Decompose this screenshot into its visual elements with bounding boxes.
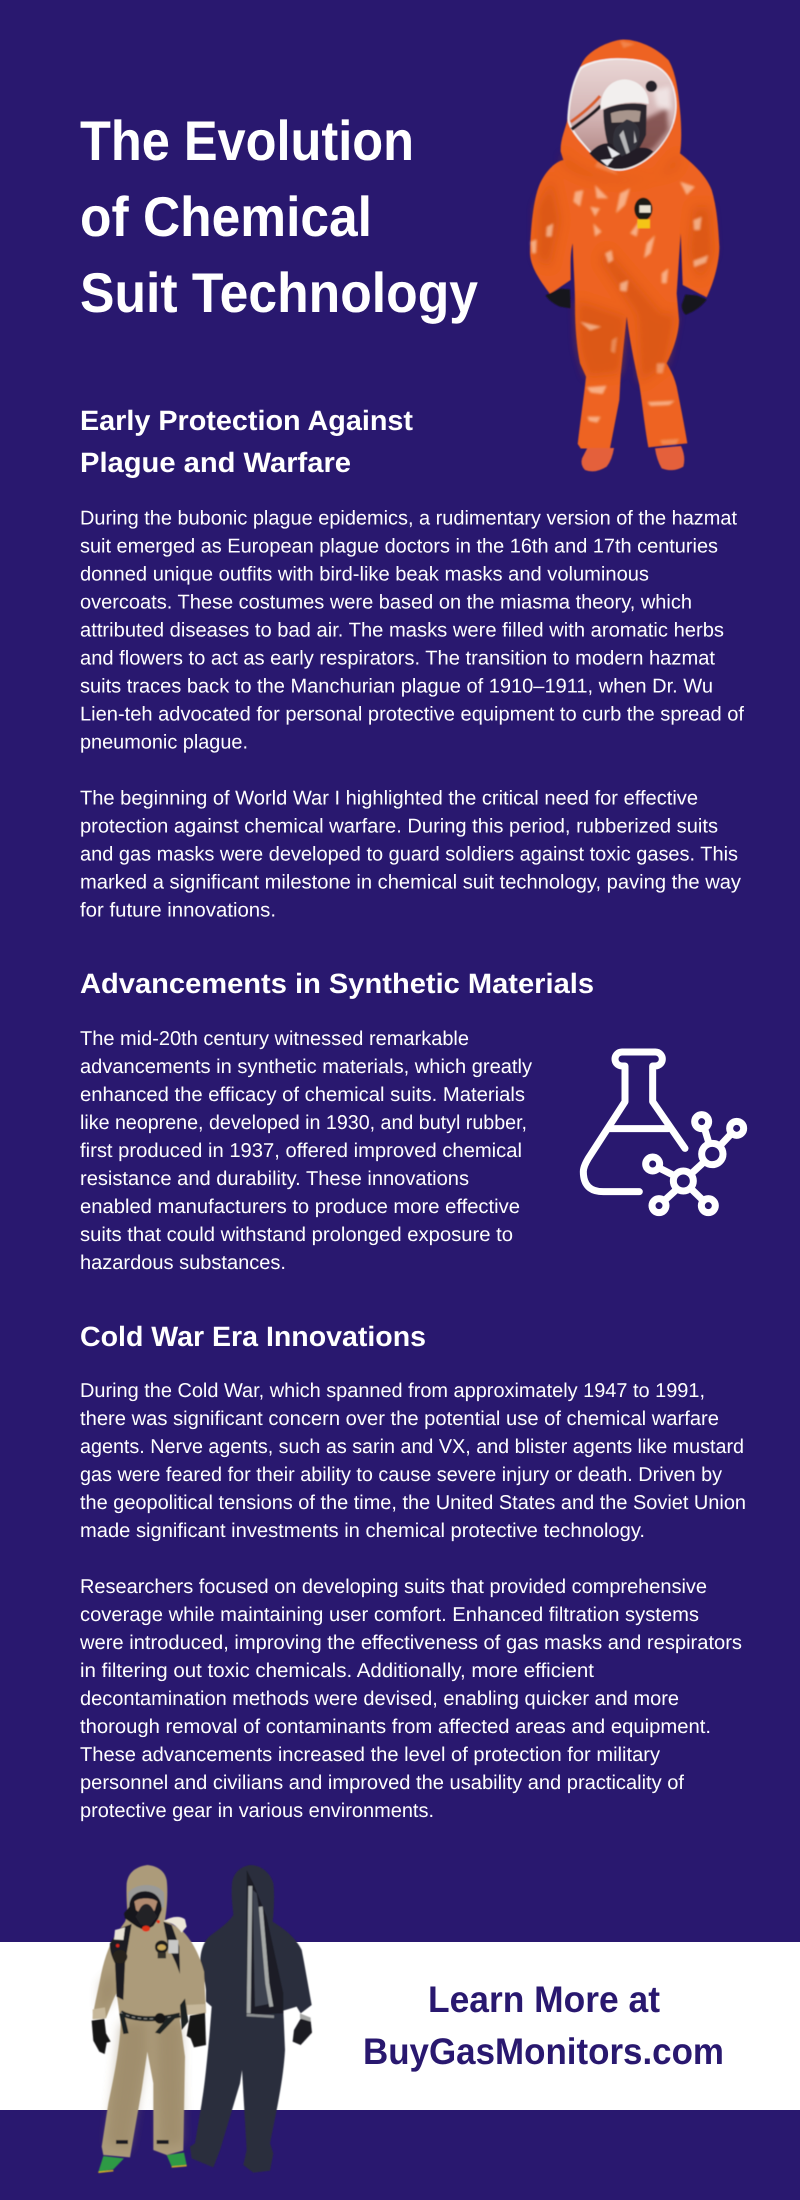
text block: researchers [79,1576,742,1822]
highlights [531,41,708,445]
text block: synthetic materials: resistance and durability. These innovations [80,1168,469,1190]
chest badge [155,1940,168,1954]
text block: world war I: for future innovations. [80,900,276,922]
title: of Chemical [80,185,372,248]
illustration: tan suit and dark suit [92,1865,312,2173]
text block: cold war agents: During the Cold War, which spanned from approximately 1947 to 1991, [80,1380,705,1402]
text block: researchers: coverage while maintaining user comfort. Enhanced filtration systems [80,1604,699,1626]
call-to-action text: Learn More at [428,1979,660,2020]
belt [121,2013,180,2019]
text block: cold war agents: agents. Nerve agents, such as sarin and VX, and blister agents like mustard [80,1436,744,1458]
text block: synthetic materials: hazardous substances. [80,1252,286,1274]
heading: synthetic materials: Advancements in Synthetic Materials [80,968,594,999]
heading: cold war: Cold War Era Innovations [80,1321,426,1352]
text block: cold war agents: made significant investments in chemical protective technology. [80,1520,645,1542]
heading: early protection [80,405,413,478]
rear zipper panel [247,1870,283,2015]
text block: synthetic materials: enhanced the efficacy of chemical suits. Materials [80,1084,525,1106]
glove [293,2019,312,2045]
text block: cold war agents: the geopolitical tensions of the time, the United States and the Soviet Union [80,1492,746,1514]
text block: plague doctors: donned unique outfits with bird-like beak masks and voluminous [80,564,649,586]
text block: synthetic materials: enabled manufacturers to produce more effective [80,1196,520,1218]
boots [581,446,684,471]
hood window and mask [128,1885,164,1907]
text block: researchers: personnel and civilians and improved the usability and practicality of [80,1772,684,1794]
text block: synthetic materials: advancements in synthetic materials, which greatly [80,1056,532,1078]
dark suit, rear view [190,1865,312,2173]
call-to-action band [0,1942,800,2110]
cuffs [93,2004,206,2019]
suit body [530,39,719,448]
text block: plague doctors: overcoats. These costumes were based on the miasma theory, which [80,592,692,614]
text block: plague doctors [80,508,744,754]
breathing apparatus [110,1924,132,2000]
call-to-action text [363,1979,724,2072]
fold shadows [537,153,713,383]
text block: cold war agents: gas were feared for their ability to cause severe injury or death. Driven by [80,1464,722,1486]
visor [567,58,677,171]
text block: plague doctors: and flowers to act as early respirators. The transition to modern hazmat [80,648,715,670]
gloves [546,289,707,315]
call-to-action text: BuyGasMonitors.com [363,2031,724,2072]
illustration: orange encapsulated hazmat suit [530,39,719,471]
boots [98,2156,124,2172]
helmet [601,79,649,110]
ankle straps [116,2140,128,2144]
text block: researchers: These advancements increased the level of protection for military [80,1744,660,1766]
text block: plague doctors: suit emerged as European plague doctors in the 16th and 17th centuries [80,536,718,558]
suit badge [634,198,652,228]
title: Suit Technology [80,261,478,324]
title: The Evolution [80,109,414,172]
text block: world war I: The beginning of World War I highlighted the critical need for effective [80,788,698,810]
text block: researchers: protective gear in various environments. [80,1800,434,1822]
tan suit, front view [92,1865,206,2172]
text block: plague doctors: Lien-teh advocated for personal protective equipment to curb the spread of [80,704,744,726]
text block: researchers: decontamination methods were devised, enabling quicker and more [80,1688,679,1710]
text block: researchers: Researchers focused on developing suits that provided comprehensive [80,1576,707,1598]
text block: world war I: and gas masks were developed to guard soldiers against toxic gases. This [80,844,738,866]
text block: synthetic materials: suits that could withstand prolonged exposure to [80,1224,513,1246]
gloves [92,2019,111,2054]
text block: synthetic materials [80,1028,532,1274]
text block: synthetic materials: first produced in 1937, offered improved chemical [80,1140,522,1162]
head and mask [603,103,647,158]
text block: researchers: thorough removal of contaminants from affected areas and equipment. [80,1716,711,1738]
text block: cold war agents: there was significant concern over the potential use of chemical warfare [80,1408,719,1430]
heading: early protection: Early Protection Against [80,405,413,436]
text block: researchers: in filtering out toxic chemicals. Additionally, more efficient [80,1660,594,1682]
text block: plague doctors: suits traces back to the Manchurian plague of 1910–1911, when Dr. Wu [80,676,713,698]
heading: early protection: Plague and Warfare [80,447,351,478]
text block: world war I: protection against chemical warfare. During this period, rubberized suits [80,816,718,838]
text block: researchers: were introduced, improving the effectiveness of gas masks and respirators [79,1632,742,1654]
text block: world war I: marked a significant milestone in chemical suit technology, paving the way [80,872,741,894]
title [80,109,478,324]
text block: plague doctors: attributed diseases to bad air. The masks were filled with aromatic herbs [80,620,724,642]
text block: plague doctors: During the bubonic plague epidemics, a rudimentary version of the hazmat [80,508,737,530]
shoulders under visor [589,143,653,169]
text block: plague doctors: pneumonic plague. [80,732,248,754]
text block: world war I [80,788,741,922]
text block: synthetic materials: like neoprene, developed in 1930, and butyl rubber, [80,1112,527,1134]
text block: synthetic materials: The mid-20th century witnessed remarkable [80,1028,469,1050]
fold shadows [100,1970,183,2150]
icon: flask and molecule [583,1052,744,1213]
text block: cold war agents [80,1380,746,1542]
